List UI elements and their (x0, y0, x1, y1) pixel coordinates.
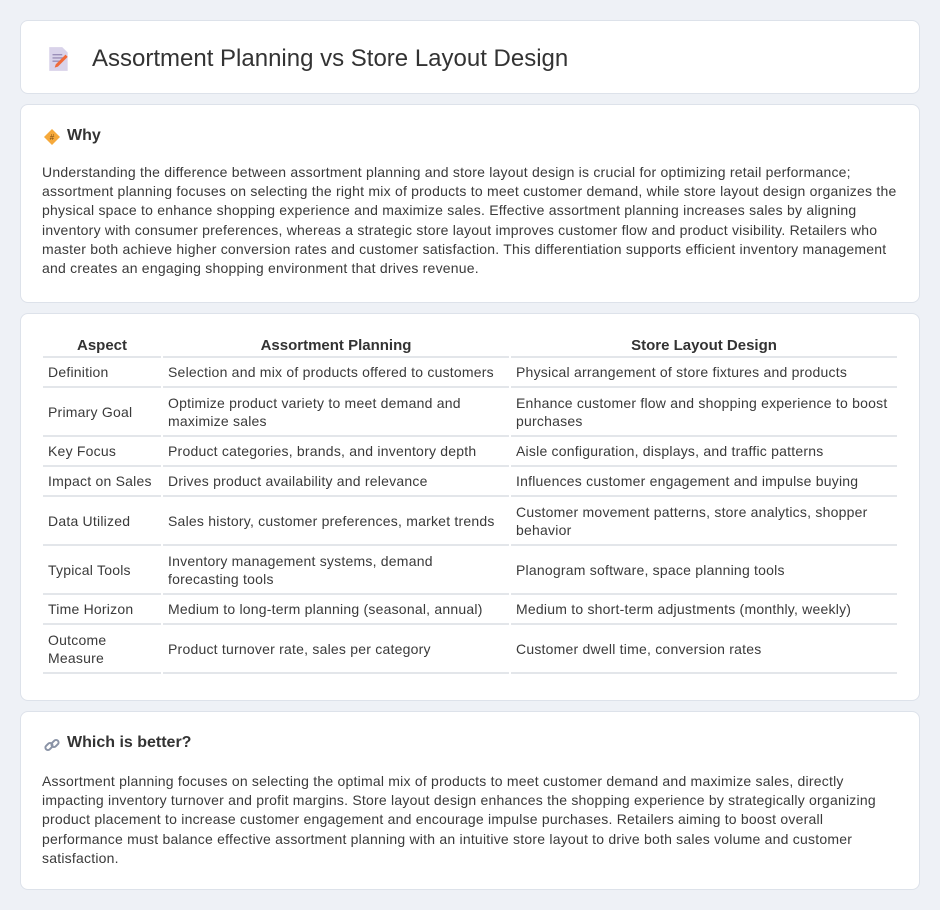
icon: document pencil (49, 47, 68, 71)
panel: comparison table: Time Horizon (48, 601, 133, 617)
panel: comparison table: maximize sales (168, 412, 267, 428)
panel: comparison table: Typical Tools (48, 562, 131, 578)
icon: diamond: # (50, 133, 55, 142)
panel: comparison table: Inventory management systems, demand (168, 552, 433, 568)
panel: comparison table: Product categories, brands, and inventory depth (168, 443, 476, 459)
panel: which is better (20, 711, 920, 890)
text block: Understanding the difference between assortment planning and store layout design is crucial for optimizing retail performance; (42, 164, 851, 180)
panel: comparison table: Medium to long-term planning (seasonal, annual) (168, 601, 483, 617)
panel: comparison table: Definition (48, 364, 109, 380)
panel: comparison table (20, 313, 920, 701)
text block: Assortment planning focuses on selecting the optimal mix of products to meet customer demand and maximize sales, directly (42, 773, 844, 789)
panel: comparison table: Product turnover rate, sales per category (168, 640, 431, 656)
panel: comparison table: Aspect (77, 336, 127, 354)
text block (42, 164, 896, 276)
text block: master both achieve higher conversion rates and customer satisfaction. This differentiation supports efficient inventory management (42, 241, 886, 257)
panel: why (20, 104, 920, 303)
text block: inventory with consumer preferences, whereas a strategic store layout improves customer flow and product visibility. Retailers who (42, 222, 877, 238)
heading: Which is better? (67, 734, 191, 751)
panel: comparison table: Store Layout Design (631, 336, 777, 354)
text block: assortment planning focuses on selecting the right mix of products to meet customer demand, while store layout design organizes the (42, 183, 896, 199)
heading: Why (67, 127, 101, 144)
panel: comparison table: Assortment Planning (261, 336, 411, 354)
text block: performance must balance effective assortment planning with an intuitive store layout to drive both sales volume and customer (42, 831, 852, 847)
panel: comparison table: forecasting tools (168, 570, 274, 586)
panel: comparison table: Customer dwell time, conversion rates (516, 640, 761, 656)
text block (42, 773, 876, 866)
panel: comparison table: Planogram software, space planning tools (516, 562, 785, 578)
panel: comparison table: Customer movement patterns, store analytics, shopper (516, 504, 867, 520)
panel: comparison table: Key Focus (48, 443, 116, 459)
text block: product placement to increase customer engagement and encourage impulse purchases. Retailers aiming to boost overall (42, 811, 823, 827)
icon: diamond (44, 129, 60, 145)
icon: link (44, 739, 60, 751)
panel: comparison table: Enhance customer flow and shopping experience to boost (516, 394, 887, 410)
text block: satisfaction. (42, 850, 119, 866)
text block: physical space to enhance shopping experience and maximize sales. Effective assortment planning increases sales by aligning (42, 202, 856, 218)
panel: comparison table: Physical arrangement of store fixtures and products (516, 364, 847, 380)
panel: comparison table: Data Utilized (48, 512, 130, 528)
panel: comparison table: Drives product availability and relevance (168, 473, 428, 489)
text block: and creates an engaging shopping environment that drives revenue. (42, 260, 479, 276)
panel: comparison table: Impact on Sales (48, 473, 152, 489)
text block: impacting inventory turnover and profit margins. Store layout design enhances the shopping experience by strategically organizing (42, 792, 876, 808)
panel: comparison table: Medium to short-term adjustments (monthly, weekly) (516, 601, 851, 617)
panel: comparison table: Sales history, customer preferences, market trends (168, 512, 495, 528)
panel: comparison table: Influences customer engagement and impulse buying (516, 473, 858, 489)
header card (20, 20, 920, 94)
panel: comparison table: Aisle configuration, displays, and traffic patterns (516, 443, 823, 459)
panel: comparison table: Optimize product variety to meet demand and (168, 394, 461, 410)
panel: comparison table: Measure (48, 650, 104, 666)
panel: comparison table: Outcome (48, 632, 106, 648)
panel: comparison table: Selection and mix of products offered to customers (168, 364, 494, 380)
panel: comparison table: Primary Goal (48, 404, 132, 420)
panel: comparison table: purchases (516, 412, 583, 428)
panel: comparison table: behavior (516, 522, 571, 538)
title: Assortment Planning vs Store Layout Design (92, 45, 568, 72)
